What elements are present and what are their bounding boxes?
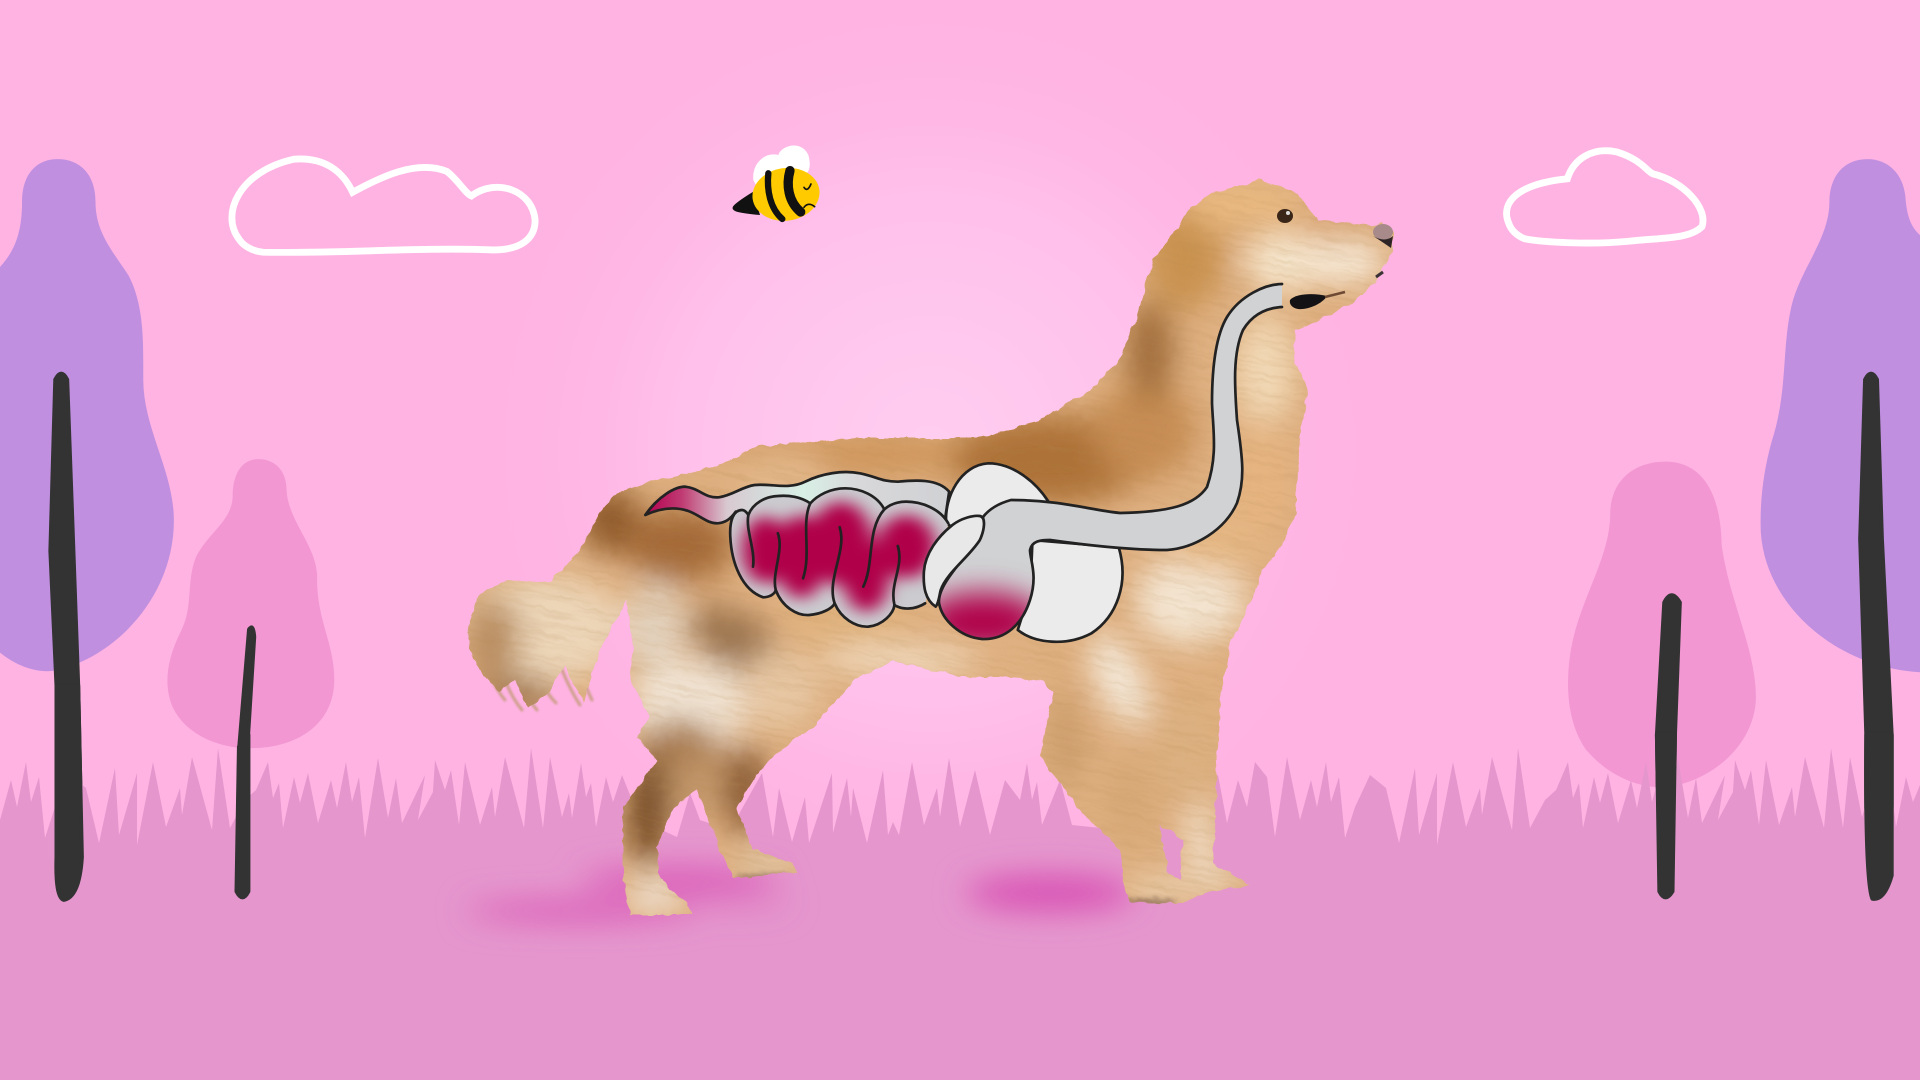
dog eye xyxy=(1277,209,1293,223)
organ: large stomach lobe xyxy=(1018,540,1122,642)
dog nose xyxy=(1373,224,1393,248)
cloud: left xyxy=(232,159,535,252)
dog xyxy=(468,178,1394,916)
dog tail fringe xyxy=(490,660,592,710)
organ: esophagus and stomach xyxy=(921,284,1282,652)
organ: colon xyxy=(645,472,949,523)
organ: upper stomach lobe xyxy=(946,463,1048,530)
organ: small lobe beside stomach xyxy=(924,516,984,607)
dog fur texture xyxy=(512,218,1372,898)
cloud: right xyxy=(1507,151,1703,243)
ground and grass xyxy=(0,748,1920,1080)
dog fur colouring xyxy=(465,183,1385,915)
ground shadows xyxy=(465,869,1135,920)
dog mouth xyxy=(1290,272,1383,309)
tree: left pink xyxy=(167,459,334,898)
organ: small intestine xyxy=(730,488,948,627)
icon: bee xyxy=(733,146,823,225)
dog paw shading xyxy=(735,875,1178,905)
tree trunks in front of grass xyxy=(56,686,1892,900)
tree: left purple xyxy=(0,159,174,900)
tree: right pink xyxy=(1568,462,1756,898)
tree: right purple xyxy=(1761,159,1920,899)
